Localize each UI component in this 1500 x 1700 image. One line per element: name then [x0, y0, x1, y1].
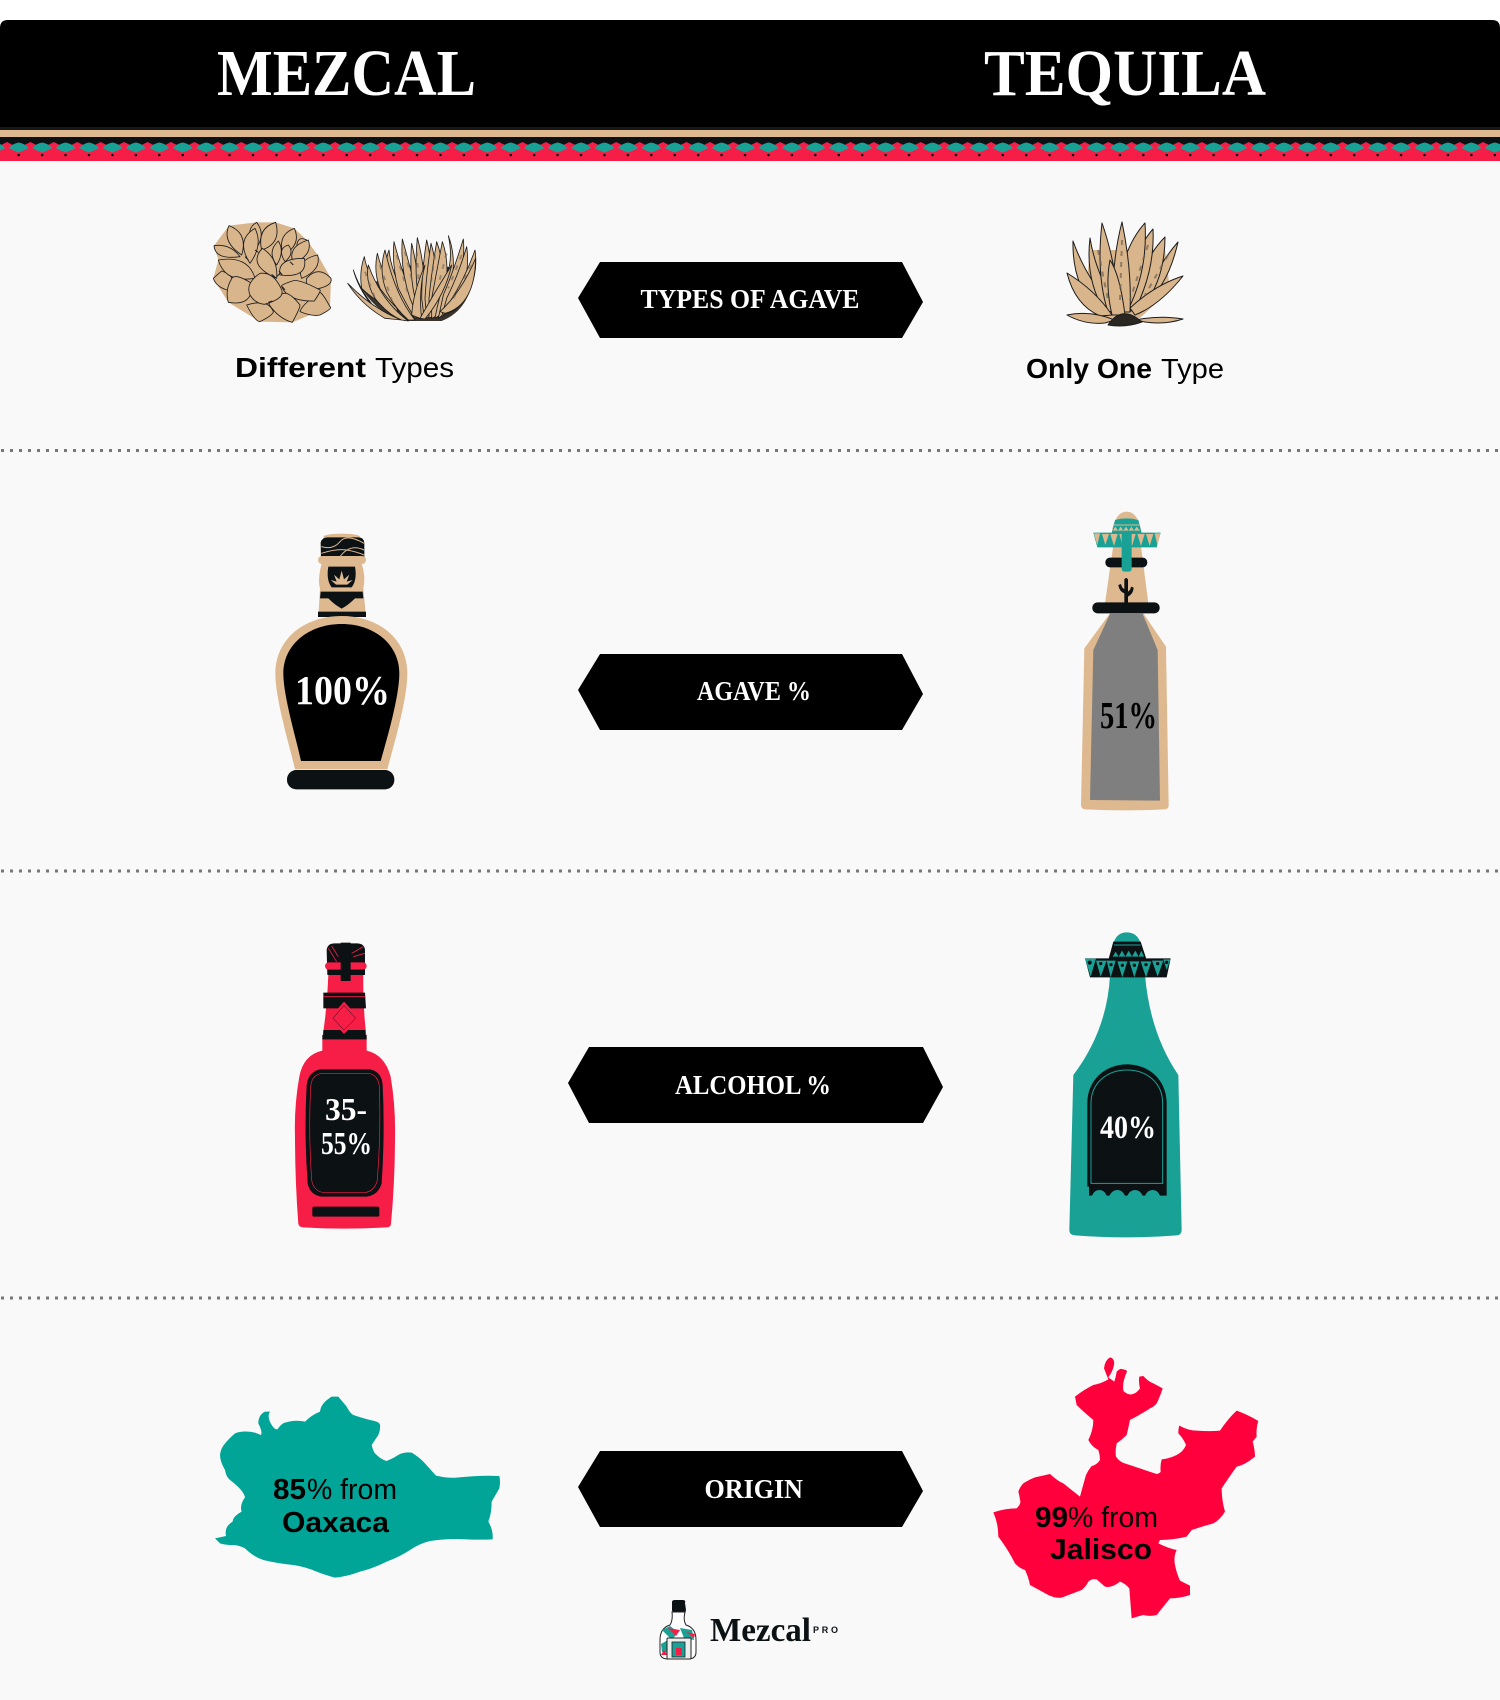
icon: logo bottle: [660, 1600, 696, 1659]
text: 99% from Jalisco: % from: [1068, 1502, 1158, 1534]
map: Jalisco: [993, 1357, 1258, 1618]
text: different types: Types: [375, 352, 454, 383]
text: only one type: Type: [1161, 353, 1224, 384]
map: Oaxaca: [215, 1397, 500, 1578]
heading: Mezcal: MEZCAL: [217, 37, 476, 110]
icon: tequila agave: [1067, 222, 1183, 326]
text: only one type: Only One: [1026, 353, 1152, 384]
wordmark: Mezcal: [710, 1612, 811, 1649]
label: origin: ORIGIN: [704, 1474, 803, 1504]
text: 85% from Oaxaca: % from: [307, 1474, 397, 1506]
label: types of agave: TYPES OF AGAVE: [640, 284, 860, 314]
icon: mezcal agave rosette: [213, 222, 331, 322]
text: 85% from Oaxaca: 85: [273, 1474, 306, 1506]
value: 100%: 100%: [295, 667, 390, 713]
logo: Mezcal Pro: [660, 1600, 838, 1659]
text: different types: Different: [235, 352, 366, 383]
value: 40%: 40%: [1100, 1110, 1156, 1146]
text: 85% from Oaxaca: Oaxaca: [282, 1507, 390, 1539]
bottle: tequila 40%: [1069, 932, 1182, 1237]
label: alcohol percent: ALCOHOL %: [675, 1070, 831, 1100]
icon: mezcal agave spiky: [348, 236, 476, 321]
bottle: tequila 51%: [1081, 512, 1169, 810]
heading: Tequila: TEQUILA: [984, 37, 1266, 110]
wordmark suffix: PRO: [813, 1625, 838, 1635]
text: 99% from Jalisco: Jalisco: [1050, 1534, 1152, 1566]
label: types of agave: [578, 262, 923, 338]
header banner: [0, 20, 1500, 161]
dividers: [1, 450, 1500, 1298]
label: agave percent: AGAVE %: [697, 676, 811, 706]
label: origin: [578, 1451, 923, 1527]
bottle: mezcal 35-55%: [295, 943, 395, 1229]
text: 99% from Jalisco: 99: [1035, 1502, 1068, 1534]
label: alcohol percent: [568, 1047, 943, 1123]
label: agave percent: [578, 654, 923, 730]
bottle: mezcal 100%: [275, 534, 407, 789]
value: 51%: 51%: [1100, 695, 1157, 737]
value: 35-55%: 35-: [325, 1091, 367, 1127]
value: 35-55%: 55%: [321, 1125, 372, 1161]
